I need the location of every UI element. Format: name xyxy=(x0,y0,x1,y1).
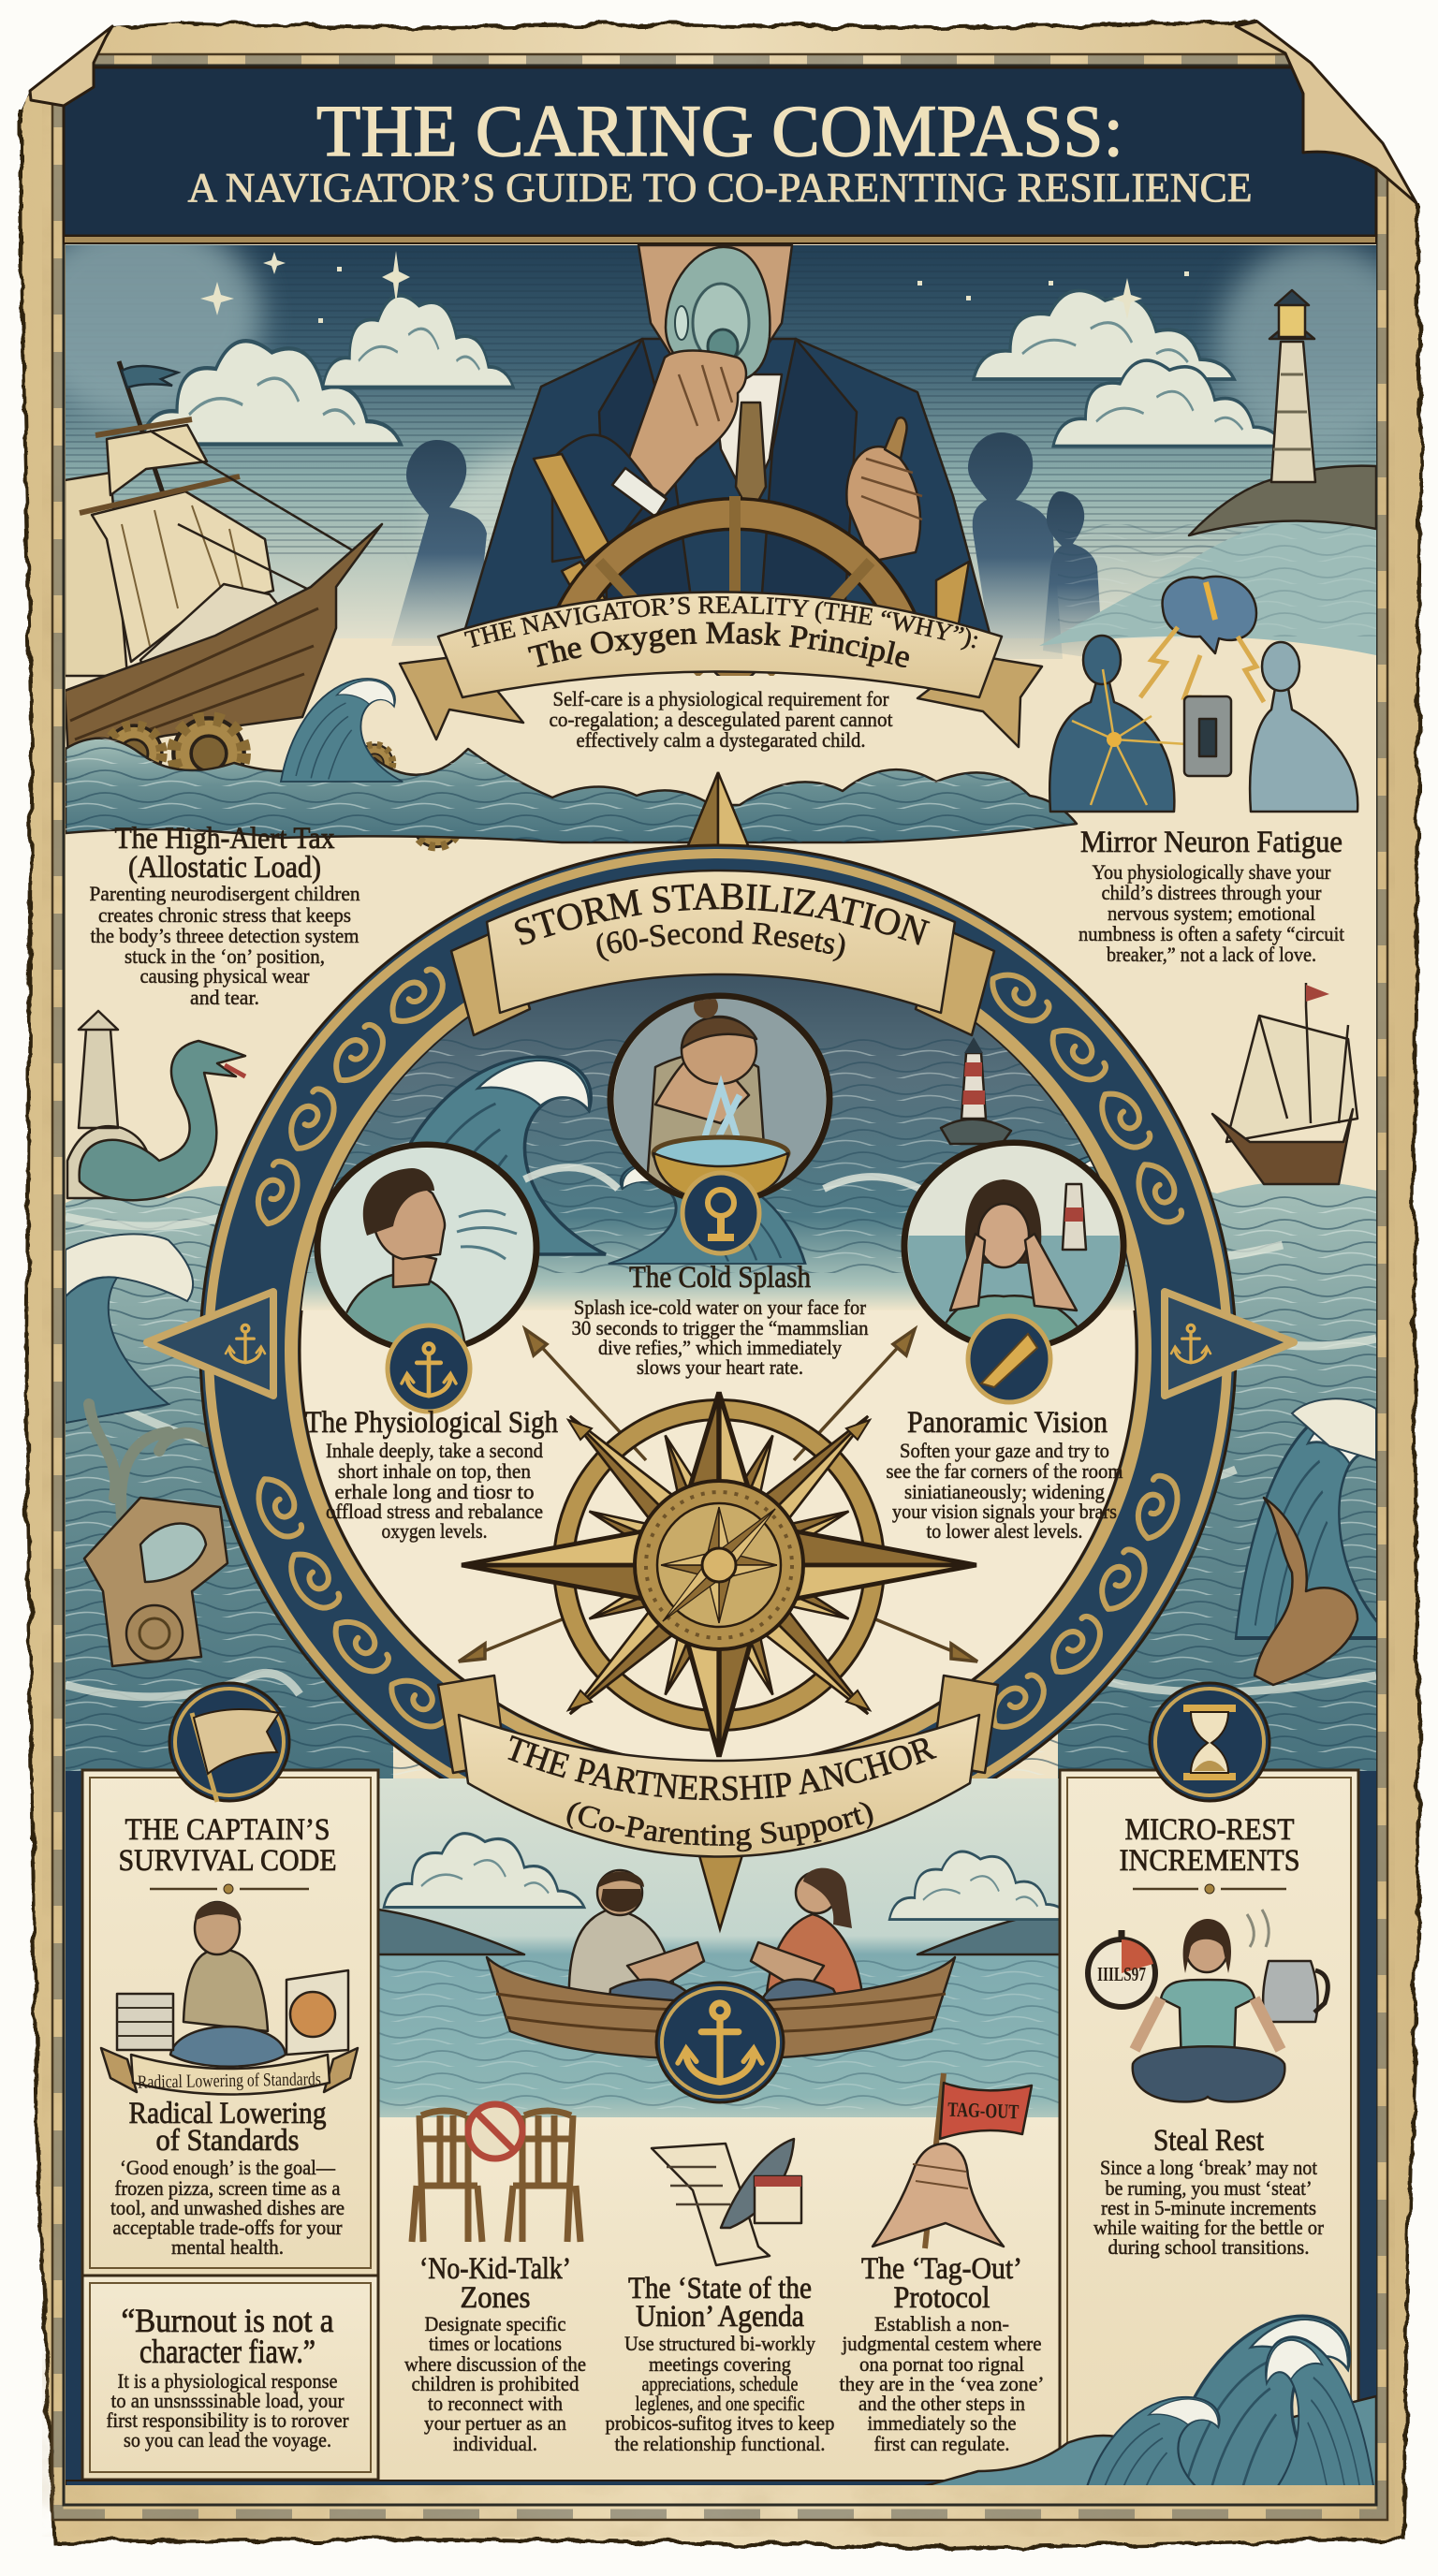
text: the physiological sigh: oxygen levels. xyxy=(382,1519,487,1543)
text: mirror neuron fatigue: child’s distrees through your xyxy=(1101,881,1322,904)
wave in the lower right corner xyxy=(843,2316,1376,2513)
footer navy band xyxy=(66,2481,1376,2503)
panel: burnout quote: first responsibility is to rorover xyxy=(107,2408,349,2432)
illustration: meditating parent, stopwatch and kettle xyxy=(1088,1910,1328,2101)
sky with clouds and stars xyxy=(66,244,1376,638)
text: state of the union agenda: Union’ Agenda xyxy=(636,2300,804,2334)
panel: micro-rest increments: INCREMENTS xyxy=(1120,1844,1299,1878)
panel: burnout quote: It is a physiological response xyxy=(118,2369,338,2393)
text: the tag-out protocol: The ‘Tag-Out’ xyxy=(861,2252,1022,2286)
text: no-kid-talk zones: to reconnect with xyxy=(428,2392,563,2415)
panel: partnership bay scene xyxy=(378,1778,1070,2484)
panel: micro-rest increments: during school transitions. xyxy=(1108,2235,1309,2259)
text: state of the union agenda: appreciations, schedule xyxy=(642,2372,799,2395)
panel: burnout quote: so you can lead the voyage. xyxy=(124,2428,331,2452)
text: the tag-out protocol: ona pornat too rignal xyxy=(859,2352,1024,2376)
text: panoramic vision: to lower alest levels. xyxy=(927,1519,1082,1543)
text: the tag-out protocol xyxy=(839,2252,1045,2455)
illustration: meditating parent, stopwatch and kettle: IIILS97 xyxy=(1097,1963,1146,1985)
text: oxygen mask principle: co-regalation; a descegulated parent cannot xyxy=(549,708,893,731)
icon: hourglass badge xyxy=(1150,1683,1269,1801)
panel: captain's survival code: acceptable trade-offs for your xyxy=(112,2216,343,2239)
panel: captain's survival code: SURVIVAL CODE xyxy=(118,1844,337,1878)
text: state of the union agenda: the relationship functional. xyxy=(614,2432,826,2455)
text: no-kid-talk zones xyxy=(404,2252,586,2455)
text: no-kid-talk zones: your pertuer as an xyxy=(424,2411,566,2435)
text: the high-alert tax: stuck in the ‘on’ position, xyxy=(125,944,325,968)
ring scroll ornaments xyxy=(226,964,1211,1737)
lighthouse left xyxy=(67,1011,152,1198)
banner: the partnership anchor xyxy=(438,1676,998,1857)
panel: captain's survival code: Radical Lowering xyxy=(129,2097,326,2130)
text: the high-alert tax: Parenting neurodisergent children xyxy=(90,882,360,905)
text: no-kid-talk zones: where discussion of the xyxy=(404,2352,586,2376)
banner: the navigator's reality xyxy=(400,591,1042,747)
side seas xyxy=(66,1181,1393,1778)
text: state of the union agenda: Use structured bi-workly xyxy=(624,2332,816,2355)
icon: large anchor badge xyxy=(656,1983,784,2102)
text: no-kid-talk zones: ‘No-Kid-Talk’ xyxy=(419,2252,571,2286)
banner: the partnership anchor: THE PARTNERSHIP ANCHOR xyxy=(500,1728,940,1808)
text: the high-alert tax xyxy=(90,822,360,1009)
text: state of the union agenda: leglenes, and one specific xyxy=(635,2392,805,2415)
icon: flag badge xyxy=(169,1683,289,1802)
text: the cold splash: dive refies,” which immediately xyxy=(598,1336,843,1359)
panel: captain's survival code: tool, and unwashed dishes are xyxy=(110,2196,345,2219)
illustration: couple in a boat xyxy=(487,1868,955,2059)
text: oxygen mask principle xyxy=(549,687,893,752)
text: state of the union agenda: probicos-sufitog itves to keep xyxy=(605,2411,835,2435)
storm sea inside the ring xyxy=(300,936,1168,1310)
panel: micro-rest increments xyxy=(1060,1770,1376,2487)
text: no-kid-talk zones: children is prohibited xyxy=(412,2372,579,2395)
compass rose xyxy=(462,1392,976,1757)
text: the tag-out protocol: they are in the ‘vea zone’ xyxy=(839,2372,1045,2395)
panel: storm stabilization ring xyxy=(147,772,1294,1856)
text: the tag-out protocol: and the other steps in xyxy=(858,2392,1025,2415)
icon: chairs xyxy=(412,2104,580,2242)
panel: captain's survival code: ‘Good enough’ is the goal— xyxy=(120,2156,335,2179)
illustration: tired parent with pizza and dishes xyxy=(101,1902,358,2095)
text: panoramic vision: Soften your gaze and try to xyxy=(900,1439,1109,1462)
panel: burnout quote: to an unsnsssinable load, your xyxy=(110,2389,345,2412)
icon: anchor badge xyxy=(388,1325,470,1412)
right ship and serpent xyxy=(1212,983,1357,1685)
text: the physiological sigh: short inhale on top, then xyxy=(338,1459,531,1483)
text: the high-alert tax: (Allostatic Load) xyxy=(128,851,321,885)
text: the physiological sigh: Inhale deeply, take a second xyxy=(326,1439,543,1462)
text: no-kid-talk zones: Zones xyxy=(461,2281,530,2315)
torn top left corner xyxy=(0,0,181,110)
text: panoramic vision xyxy=(886,1406,1123,1543)
text: mirror neuron fatigue: breaker,” not a lack of love. xyxy=(1107,943,1316,966)
panel: captain's survival code: mental health. xyxy=(171,2235,284,2259)
panel: micro-rest increments: MICRO-REST xyxy=(1125,1813,1294,1847)
icon: tag-out flag and hands xyxy=(873,2073,1032,2248)
text: state of the union agenda xyxy=(605,2272,835,2455)
text: mirror neuron fatigue: nervous system; emotional xyxy=(1108,901,1315,925)
panel: captain's survival code xyxy=(66,1770,378,2487)
lighthouse on the headland xyxy=(1039,290,1376,655)
banner: storm stabilization: STORM STABILIZATION xyxy=(515,884,931,945)
panel: micro-rest increments: be ruming, you must ‘steat’ xyxy=(1105,2176,1313,2200)
banner: storm stabilization xyxy=(451,871,994,1035)
text: the cold splash: Splash ice-cold water on your face for xyxy=(574,1295,866,1319)
panel: captain's survival code: of Standards xyxy=(155,2124,300,2158)
panel: captain's survival code: frozen pizza, screen time as a xyxy=(114,2176,341,2200)
compass arrows xyxy=(459,1329,977,1661)
panel: micro-rest increments: Steal Rest xyxy=(1153,2124,1264,2158)
banner: the partnership anchor: (Co-Parenting Support) xyxy=(563,1794,877,1853)
panel: micro-rest increments: Since a long ‘break’ may not xyxy=(1100,2156,1318,2179)
banner: the navigator's reality: The Oxygen Mask Principle xyxy=(526,616,914,675)
text: the tag-out protocol: judgmental cestem where xyxy=(842,2332,1042,2355)
text: the tag-out protocol: first can regulate. xyxy=(874,2432,1009,2455)
left sea creatures xyxy=(67,1011,245,1666)
circle: the cold splash xyxy=(609,992,833,1208)
icon: agenda scroll and quill xyxy=(652,2139,801,2265)
banner: radical lowering label: Radical Lowering of Standards xyxy=(138,2069,321,2093)
panel: micro-rest increments: while waiting for the bettle or xyxy=(1093,2216,1324,2239)
panel: burnout quote: “Burnout is not a xyxy=(122,2302,334,2339)
text: the physiological sigh: erhale long and tiosr to xyxy=(335,1480,534,1503)
text: the tag-out protocol: immediately so the xyxy=(867,2411,1017,2435)
text: the high-alert tax: creates chronic stress that keeps xyxy=(98,903,351,927)
text: the cold splash: The Cold Splash xyxy=(629,1261,811,1295)
child silhouettes xyxy=(391,432,1103,660)
text: the high-alert tax: causing physical wear xyxy=(140,964,310,988)
text: the tag-out protocol: Establish a non- xyxy=(874,2312,1009,2335)
subtitle: A NAVIGATOR’S GUIDE TO CO-PARENTING RESILIENCE xyxy=(187,165,1253,211)
waves below the ship xyxy=(66,679,1077,842)
text: no-kid-talk zones: times or locations xyxy=(429,2332,562,2355)
torn top right corner xyxy=(1236,0,1438,203)
text: the high-alert tax: the body’s threee detection system xyxy=(90,924,360,947)
text: mirror neuron fatigue: numbness is often a safety “circuit xyxy=(1078,922,1345,945)
header banner xyxy=(64,67,1376,243)
text: the cold splash: 30 seconds to trigger the “mammslian xyxy=(571,1316,869,1339)
icon: bellows badge xyxy=(682,1173,759,1253)
panel: burnout quote xyxy=(82,2276,378,2480)
text: panoramic vision: siniatianeously; widening xyxy=(904,1480,1105,1503)
mirror neuron figures xyxy=(1049,577,1357,812)
text: the high-alert tax: and tear. xyxy=(190,986,259,1009)
text: mirror neuron fatigue: You physiologically shave your xyxy=(1092,860,1331,884)
text: oxygen mask principle: Self-care is a physiological requirement for xyxy=(552,687,889,710)
icon: spyglass badge xyxy=(968,1316,1050,1402)
ship's wheel xyxy=(551,496,918,881)
panel: micro-rest increments: rest in 5-minute increments xyxy=(1101,2196,1316,2219)
ship and gears xyxy=(65,361,460,847)
figure: navigator at the helm xyxy=(391,244,1100,676)
banner: radical lowering label xyxy=(101,2048,358,2095)
text: panoramic vision: Panoramic Vision xyxy=(907,1406,1108,1440)
text: mirror neuron fatigue: Mirror Neuron Fatigue xyxy=(1080,826,1343,859)
text: the physiological sigh xyxy=(305,1406,558,1543)
circle: panoramic vision xyxy=(903,1143,1124,1353)
text: the cold splash xyxy=(571,1261,869,1379)
text: state of the union agenda: The ‘State of the xyxy=(628,2272,812,2305)
lower spike of the ring xyxy=(697,1849,744,1929)
text: no-kid-talk zones: Designate specific xyxy=(425,2312,566,2335)
title: THE CARING COMPASS: xyxy=(316,90,1123,171)
text: panoramic vision: see the far corners of the room xyxy=(886,1459,1123,1483)
icon: tag-out flag and hands: TAG-OUT xyxy=(947,2098,1020,2123)
circle: physiological sigh xyxy=(317,1145,538,1353)
text: state of the union agenda: meetings covering xyxy=(649,2352,791,2376)
text: panoramic vision: your vision signals your brars xyxy=(892,1500,1117,1523)
text: oxygen mask principle: effectively calm a dystegarated child. xyxy=(577,728,865,752)
small lighthouse in storm xyxy=(941,1037,1011,1144)
text: the physiological sigh: offload stress and rebalance xyxy=(326,1500,543,1523)
banner: storm stabilization: (60-Second Resets) xyxy=(596,920,844,962)
panel: captain's survival code: THE CAPTAIN’S xyxy=(125,1813,330,1847)
text: mirror neuron fatigue xyxy=(1078,826,1345,966)
kraken and gears xyxy=(89,1404,206,1516)
sea dragon xyxy=(80,1041,245,1200)
text: no-kid-talk zones: individual. xyxy=(453,2432,537,2455)
text: the high-alert tax: The High-Alert Tax xyxy=(114,822,335,856)
text: the physiological sigh: The Physiological Sigh xyxy=(305,1406,558,1440)
text: the tag-out protocol: Protocol xyxy=(893,2281,990,2315)
banner: the navigator's reality: THE NAVIGATOR’S REALITY (THE “WHY”): xyxy=(462,591,982,654)
text: the cold splash: slows your heart rate. xyxy=(637,1355,803,1379)
panel: burnout quote: character fiaw.” xyxy=(139,2333,315,2370)
